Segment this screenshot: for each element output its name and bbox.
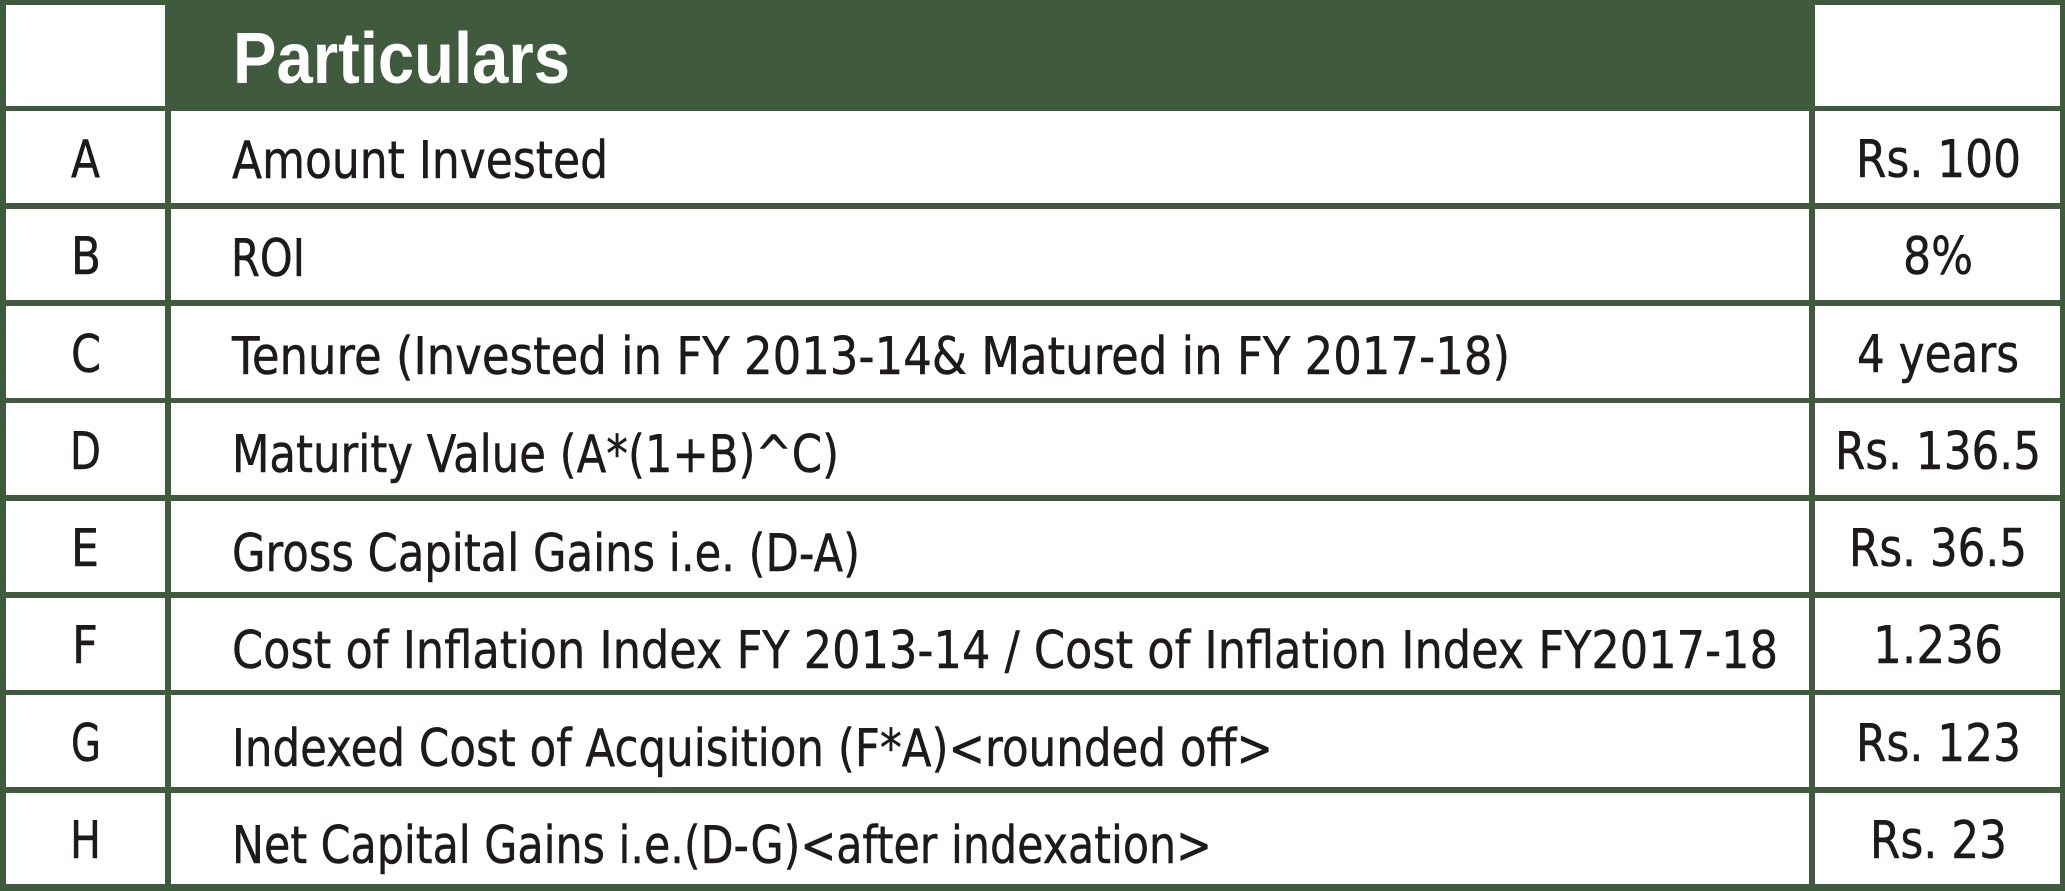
row C: tenure: 4 years [1857, 325, 2019, 385]
row A: amount invested [71, 130, 2021, 191]
row C: tenure: C [71, 325, 101, 385]
row G: indexed cost of acquisition: Indexed Cost of Acquisition (F*A)<rounded off> [232, 719, 1273, 779]
row E: gross capital gains: Rs. 36.5 [1849, 519, 2027, 579]
row A: amount invested: Rs. 100 [1856, 130, 2021, 190]
row B: ROI [71, 227, 1973, 289]
row B: ROI: ROI [231, 229, 305, 289]
row A: amount invested: Amount Invested [232, 131, 608, 191]
row H: net capital gains: Net Capital Gains i.e.(D-G)<after indexation> [232, 816, 1212, 876]
row D: maturity value [70, 422, 2041, 485]
row B: ROI: B [71, 227, 101, 287]
heading: Particulars: Particulars [233, 19, 570, 99]
row C: tenure: Tenure (Invested in FY 2013-14& Matured in FY 2017-18) [231, 327, 1510, 387]
row A: amount invested: A [71, 130, 100, 190]
row D: maturity value: Maturity Value (A*(1+B)^C) [232, 425, 839, 485]
row F: cost of inflation index: 1.236 [1873, 616, 2003, 676]
row G: indexed cost of acquisition: G [71, 714, 101, 774]
row G: indexed cost of acquisition: Rs. 123 [1856, 714, 2021, 774]
row D: maturity value: D [70, 422, 101, 482]
row H: net capital gains [70, 811, 2007, 876]
row G: indexed cost of acquisition [71, 714, 2021, 779]
row F: cost of inflation index: F [72, 616, 98, 676]
row E: gross capital gains [71, 519, 2027, 584]
row F: cost of inflation index: Cost of Inflation Index FY 2013-14 / Cost of Inflation Index FY2017-18 [232, 621, 1778, 681]
row H: net capital gains: H [70, 811, 101, 871]
row E: gross capital gains: E [71, 519, 99, 579]
row E: gross capital gains: Gross Capital Gains i.e. (D-A) [232, 524, 860, 584]
row B: ROI: 8% [1903, 227, 1973, 287]
row H: net capital gains: Rs. 23 [1870, 811, 2007, 871]
